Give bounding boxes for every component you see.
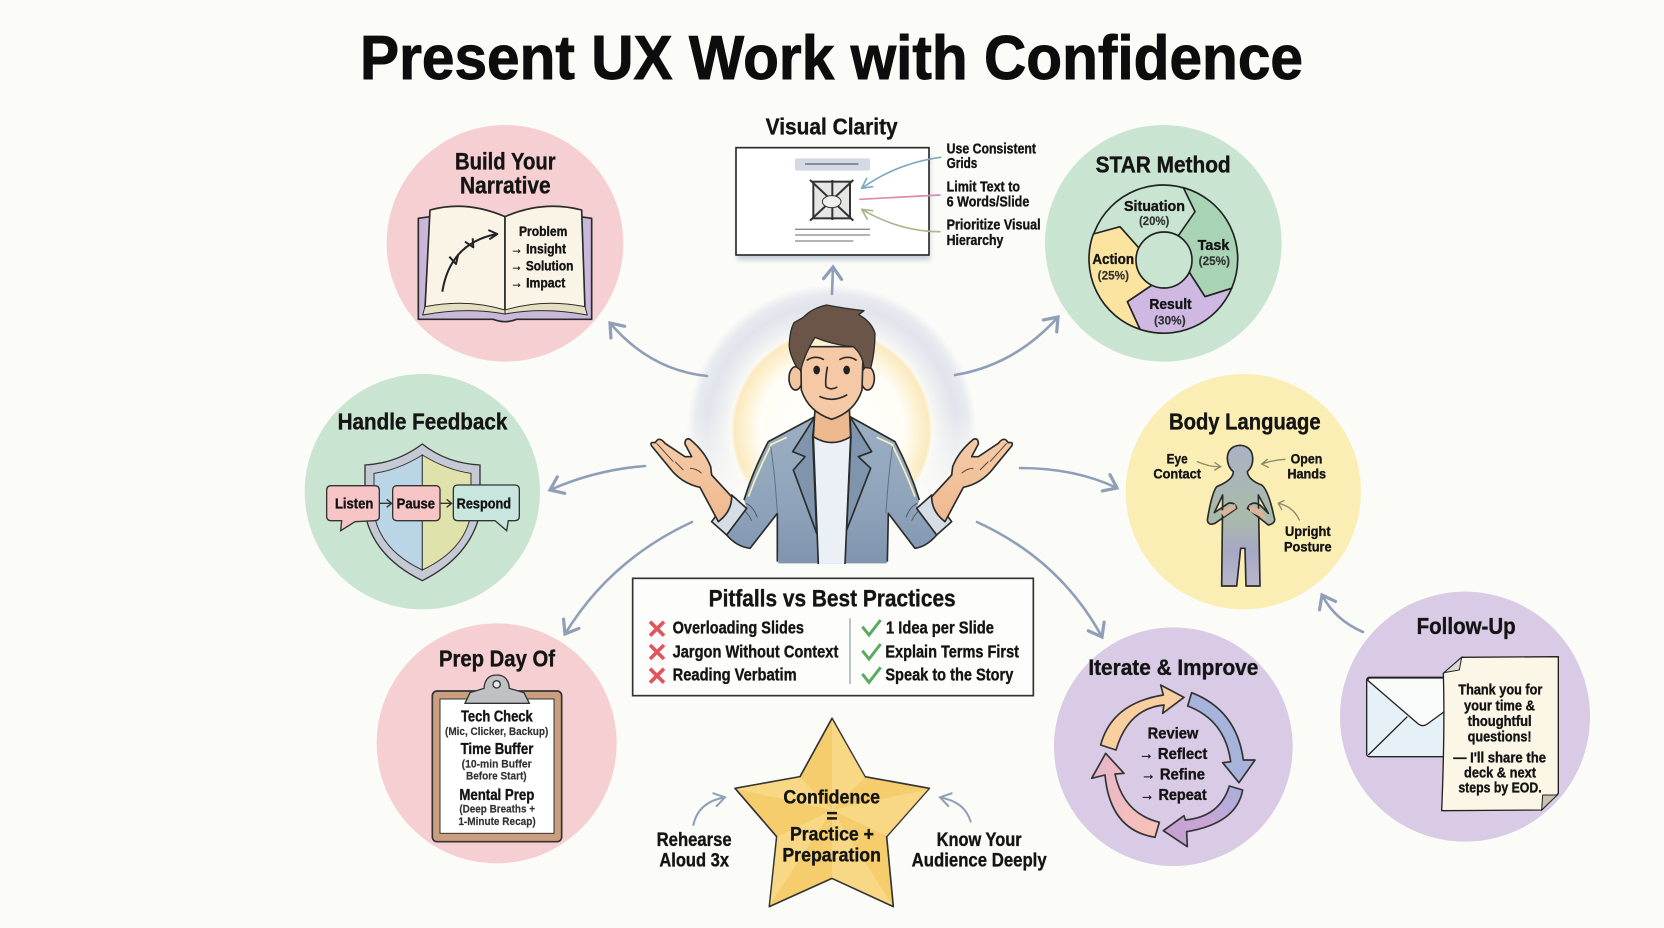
- chart labels: Task: [1198, 238, 1230, 254]
- jacket: [727, 417, 937, 563]
- star text: Preparation: [782, 846, 881, 867]
- checklist: (Deep Breaths +: [459, 804, 535, 816]
- chart labels: (30%): [1154, 313, 1186, 327]
- heading: Prep Day Of: [439, 646, 555, 672]
- speech bubble: pause: Pause: [397, 496, 435, 512]
- star text: Confidence: [783, 787, 880, 808]
- checklist: (Mic, Clicker, Backup): [445, 726, 549, 738]
- callout arrows: [1197, 459, 1299, 520]
- speech bubble: listen: Listen: [335, 496, 373, 512]
- left arm and hand: [651, 439, 747, 535]
- heading: Build Your: [455, 148, 556, 175]
- heading: [455, 148, 556, 199]
- note text: steps by EOD.: [1458, 781, 1542, 797]
- eyes: [813, 366, 850, 374]
- note card: [1442, 657, 1558, 811]
- cycle steps: → Repeat: [1140, 787, 1207, 804]
- callout arrows: [860, 157, 941, 232]
- chart labels: (25%): [1098, 268, 1129, 282]
- panel: handle feedback: [305, 374, 540, 609]
- chart labels: (25%): [1199, 254, 1230, 268]
- shirt edges: [813, 437, 851, 564]
- star text: Practice +: [790, 825, 874, 846]
- checklist: Tech Check: [461, 709, 533, 726]
- icon: open book: [418, 206, 592, 322]
- panel: iterate and improve: [1054, 627, 1293, 866]
- chart labels: Action: [1092, 252, 1134, 268]
- face: [801, 347, 863, 419]
- central presenter figure: [651, 285, 1012, 575]
- cycle steps: → Refine: [1141, 766, 1205, 783]
- cycle arrows: [1092, 685, 1255, 847]
- box heading: Pitfalls vs Best Practices: [709, 586, 956, 613]
- narrative steps: Problem: [519, 223, 567, 239]
- icon: shield: [365, 444, 480, 581]
- speech bubble: pause: [393, 486, 440, 521]
- slide text lines: [795, 229, 870, 241]
- cycle steps: → Reflect: [1139, 746, 1208, 763]
- speech bubble: respond: [453, 485, 519, 531]
- title: Present UX Work with Confidence: [360, 24, 1303, 93]
- panel: body language: [1126, 374, 1361, 609]
- heading: STAR Method: [1096, 151, 1231, 177]
- panel: pitfalls and confidence: [633, 578, 1047, 907]
- callout labels: 6 Words/Slide: [947, 195, 1029, 211]
- note text: — I'll share the: [1453, 750, 1546, 766]
- panel: star method: [1045, 125, 1282, 362]
- best practices list: [885, 617, 1019, 685]
- brows, nose and smile: [807, 357, 856, 399]
- right ear: [861, 367, 874, 390]
- star text: =: [826, 806, 838, 827]
- chart labels: Result: [1149, 297, 1192, 313]
- speech bubble: listen: [327, 486, 379, 531]
- callout labels: Prioritize Visual: [947, 217, 1041, 233]
- label: know your audience: Audience Deeply: [912, 851, 1047, 872]
- divider: [848, 618, 851, 684]
- flow arrows: [380, 499, 452, 507]
- cycle steps: [1139, 725, 1208, 804]
- pitfalls list: Overloading Slides: [673, 617, 804, 637]
- slide shadow: [737, 155, 930, 260]
- panel: prep day of: [377, 623, 617, 863]
- star: [735, 718, 929, 907]
- label: rehearse aloud: Aloud 3x: [659, 851, 729, 872]
- best practices list: 1 Idea per Slide: [886, 617, 994, 637]
- label: know your audience: [912, 830, 1047, 872]
- narrative steps: → Insight: [511, 240, 566, 256]
- callout labels: Use Consistent: [947, 141, 1036, 157]
- note text: [1453, 682, 1546, 797]
- left ear: [789, 367, 802, 390]
- chart labels: Situation: [1124, 199, 1185, 215]
- star side arrows: [693, 793, 971, 825]
- panel: build your narrative: [387, 125, 623, 362]
- callout labels: Limit Text to: [947, 180, 1020, 196]
- chart labels: (20%): [1139, 214, 1169, 228]
- best practices list: Speak to the Story: [885, 665, 1014, 685]
- label: rehearse aloud: [657, 830, 732, 872]
- note text: questions!: [1468, 730, 1532, 746]
- callout labels: Grids: [947, 156, 977, 172]
- connector arrows: [550, 267, 1363, 637]
- left lapel: [793, 417, 817, 533]
- halo glow: [691, 289, 972, 484]
- note text: your time &: [1464, 699, 1535, 715]
- right lapel: [847, 417, 872, 530]
- callout labels: [1153, 450, 1332, 555]
- slide header bar: [795, 158, 870, 171]
- callout labels: Open: [1291, 450, 1322, 466]
- right arm and hand: [917, 439, 1012, 535]
- pitfalls list: Reading Verbatim: [673, 665, 797, 685]
- pitfalls list: Jargon Without Context: [673, 641, 839, 661]
- icon: clipboard: [432, 675, 562, 842]
- note text: thoughtful: [1468, 714, 1532, 730]
- checklist: (10-min Buffer: [462, 758, 532, 770]
- cycle steps: Review: [1148, 725, 1199, 742]
- narrative steps: [511, 223, 573, 290]
- note text: Thank you for: [1458, 682, 1543, 698]
- pitfalls list: [673, 617, 839, 685]
- speech bubble: respond: Respond: [457, 496, 511, 512]
- callout labels: Posture: [1284, 539, 1332, 555]
- checklist: Before Start): [466, 770, 527, 782]
- heading: Visual Clarity: [766, 113, 898, 139]
- heading: Iterate & Improve: [1088, 655, 1258, 680]
- callout labels: Eye: [1167, 450, 1188, 466]
- checklist: Mental Prep: [459, 787, 534, 804]
- callout labels: Hierarchy: [947, 233, 1004, 249]
- panel: follow-up: [1340, 592, 1590, 842]
- checklist: 1-Minute Recap): [458, 816, 536, 828]
- callout labels: Upright: [1285, 523, 1331, 539]
- chart labels: [1092, 199, 1230, 327]
- callout labels: Contact: [1153, 465, 1201, 481]
- heading: Handle Feedback: [338, 408, 508, 434]
- note text: deck & next: [1464, 766, 1536, 782]
- heading: Narrative: [460, 172, 551, 199]
- heading: Body Language: [1169, 408, 1321, 434]
- red crosses: [650, 622, 664, 683]
- best practices list: Explain Terms First: [885, 641, 1019, 661]
- figure silhouette: [1207, 445, 1275, 586]
- donut chart: [1089, 185, 1238, 333]
- icon: envelope: [1367, 677, 1453, 757]
- callout labels: Hands: [1287, 465, 1326, 481]
- checklist: Time Buffer: [461, 741, 533, 758]
- label: rehearse aloud: Rehearse: [657, 830, 732, 851]
- shirt: [813, 437, 851, 563]
- hair: [789, 305, 875, 370]
- pitfalls vs best practices box: [633, 578, 1033, 696]
- slide frame: [736, 148, 929, 255]
- heading: Follow-Up: [1417, 613, 1516, 639]
- label: know your audience: Know Your: [937, 830, 1022, 851]
- checklist: [445, 709, 549, 828]
- icon: image placeholder: [810, 180, 853, 221]
- green checks: [862, 620, 881, 682]
- narrative steps: → Solution: [511, 258, 573, 274]
- narrative steps: → Impact: [511, 274, 566, 290]
- panel: visual clarity: [736, 113, 1041, 260]
- star text: [782, 787, 881, 867]
- callout labels: [947, 141, 1041, 249]
- neck: [813, 408, 851, 442]
